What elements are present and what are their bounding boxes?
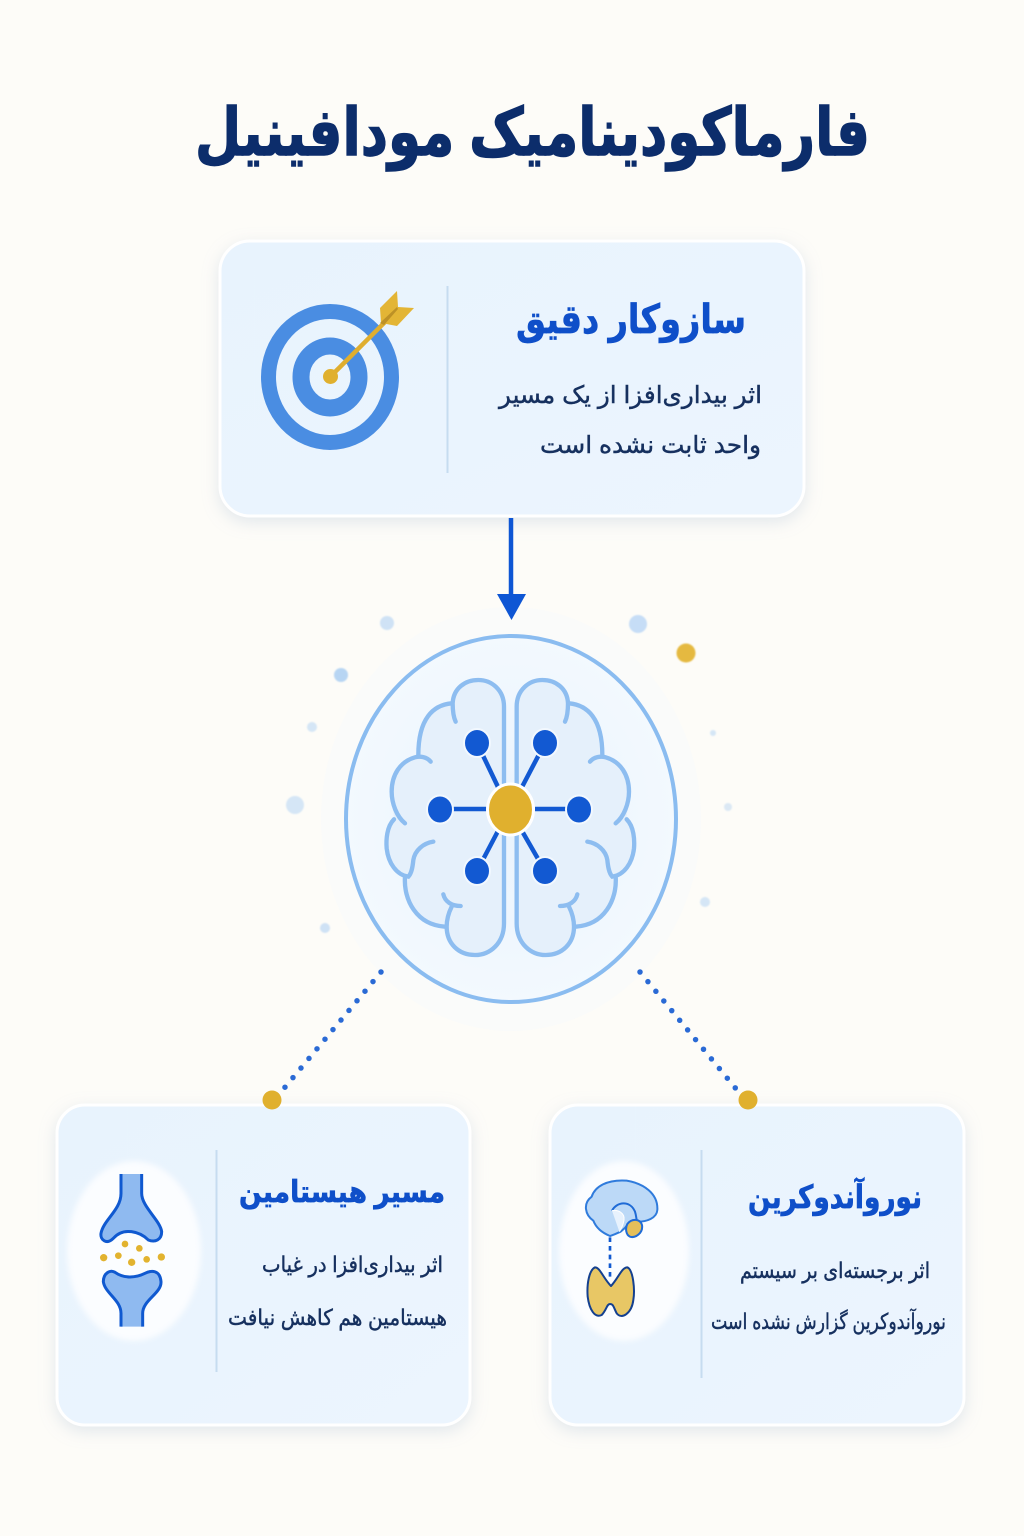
- text: neuroendocrine line 1: اثر برجسته‌ای بر سیستم: [740, 1258, 930, 1284]
- text: histamine line 1: اثر بیداری‌افزا در غیاب: [262, 1252, 443, 1277]
- text: histamine line 2: هیستامین هم کاهش نیافت: [228, 1305, 447, 1331]
- heading: precise mechanism: سازوکار دقیق: [516, 298, 746, 343]
- icon: target with arrow: [268, 291, 414, 442]
- dotted connector right: [640, 972, 758, 1110]
- dotted connector left: [262, 972, 381, 1110]
- heading: neuroendocrine: نوروآندوکرین: [748, 1177, 922, 1216]
- title: فارماکودینامیک مودافینیل: [195, 95, 870, 172]
- network nodes: [427, 729, 592, 885]
- icon: synapse: [67, 1161, 201, 1341]
- text: precise mechanism line 1: اثر بیداری‌افزا از یک مسیر: [498, 382, 762, 409]
- icon: brain: [386, 680, 634, 955]
- panel: precise mechanism: [220, 241, 804, 516]
- icon: brain and thyroid: [559, 1161, 689, 1341]
- floating particles: [286, 615, 732, 933]
- text: precise mechanism line 2: واحد ثابت نشده است: [540, 432, 761, 459]
- panel: histamine pathway: [57, 1105, 470, 1425]
- panel: neuroendocrine: [550, 1105, 964, 1425]
- text: neuroendocrine line 2: نوروآندوکرین گزارش نشده است: [711, 1308, 946, 1335]
- heading: histamine pathway: مسیر هیستامین: [239, 1176, 445, 1209]
- brain disc: [321, 607, 701, 1031]
- arrow: mechanism to brain: [497, 518, 526, 620]
